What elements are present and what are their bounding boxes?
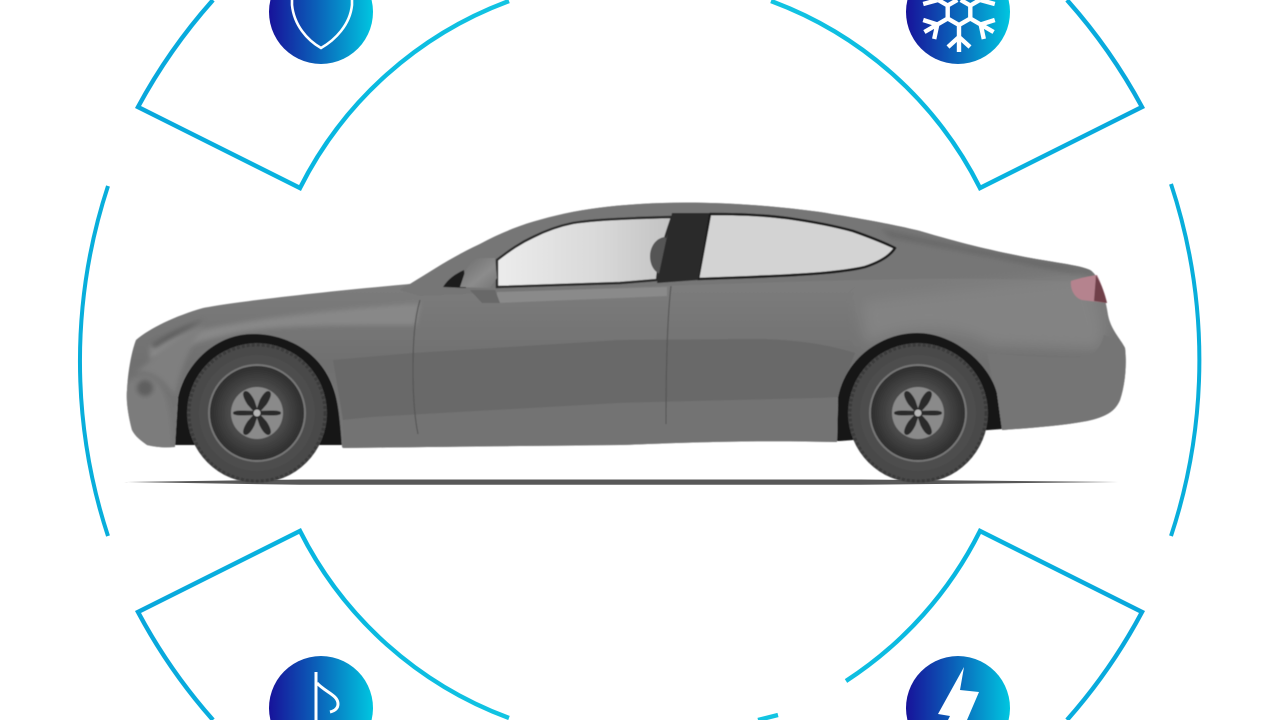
arc: right — [1171, 184, 1199, 536]
icon: shield — [269, 0, 373, 64]
icon: snowflake — [906, 0, 1010, 64]
hood shadow — [151, 322, 196, 349]
door seams — [413, 286, 671, 434]
tail light — [1071, 275, 1107, 303]
front window — [497, 217, 672, 287]
icon: lightning bolt — [906, 656, 1010, 720]
panel outline: top right — [771, 0, 1142, 188]
car — [120, 195, 1140, 483]
front bumper — [128, 379, 166, 408]
roof band — [409, 202, 1094, 284]
front wheel — [187, 343, 327, 483]
door lower band — [348, 440, 832, 448]
driver silhouette — [650, 237, 667, 274]
car body — [120, 195, 1140, 455]
hood highlight — [150, 303, 420, 360]
rear wheel — [848, 343, 988, 483]
mirror shadow on door — [470, 290, 500, 303]
arc fragment: bottom centre — [758, 715, 778, 720]
ground shadow — [124, 480, 1118, 485]
panel outline: bottom left — [138, 531, 509, 720]
rear window — [698, 214, 895, 279]
icon: music note — [269, 656, 373, 720]
door mid band — [333, 339, 855, 420]
rear quarter lower — [1004, 350, 1126, 430]
centre pillar — [657, 213, 709, 283]
rear deck shading — [888, 232, 1089, 276]
panel outline: top left — [138, 0, 509, 188]
rear wheel well — [837, 332, 1002, 441]
window sill highlight — [497, 287, 667, 303]
wing mirror — [460, 258, 497, 288]
front wheel well — [175, 333, 342, 445]
mirror mount — [443, 270, 466, 288]
arc: left — [80, 186, 108, 536]
panel outline: bottom right — [846, 531, 1142, 720]
bumper intake shadow — [137, 380, 153, 396]
rear quarter highlight — [860, 275, 1105, 350]
